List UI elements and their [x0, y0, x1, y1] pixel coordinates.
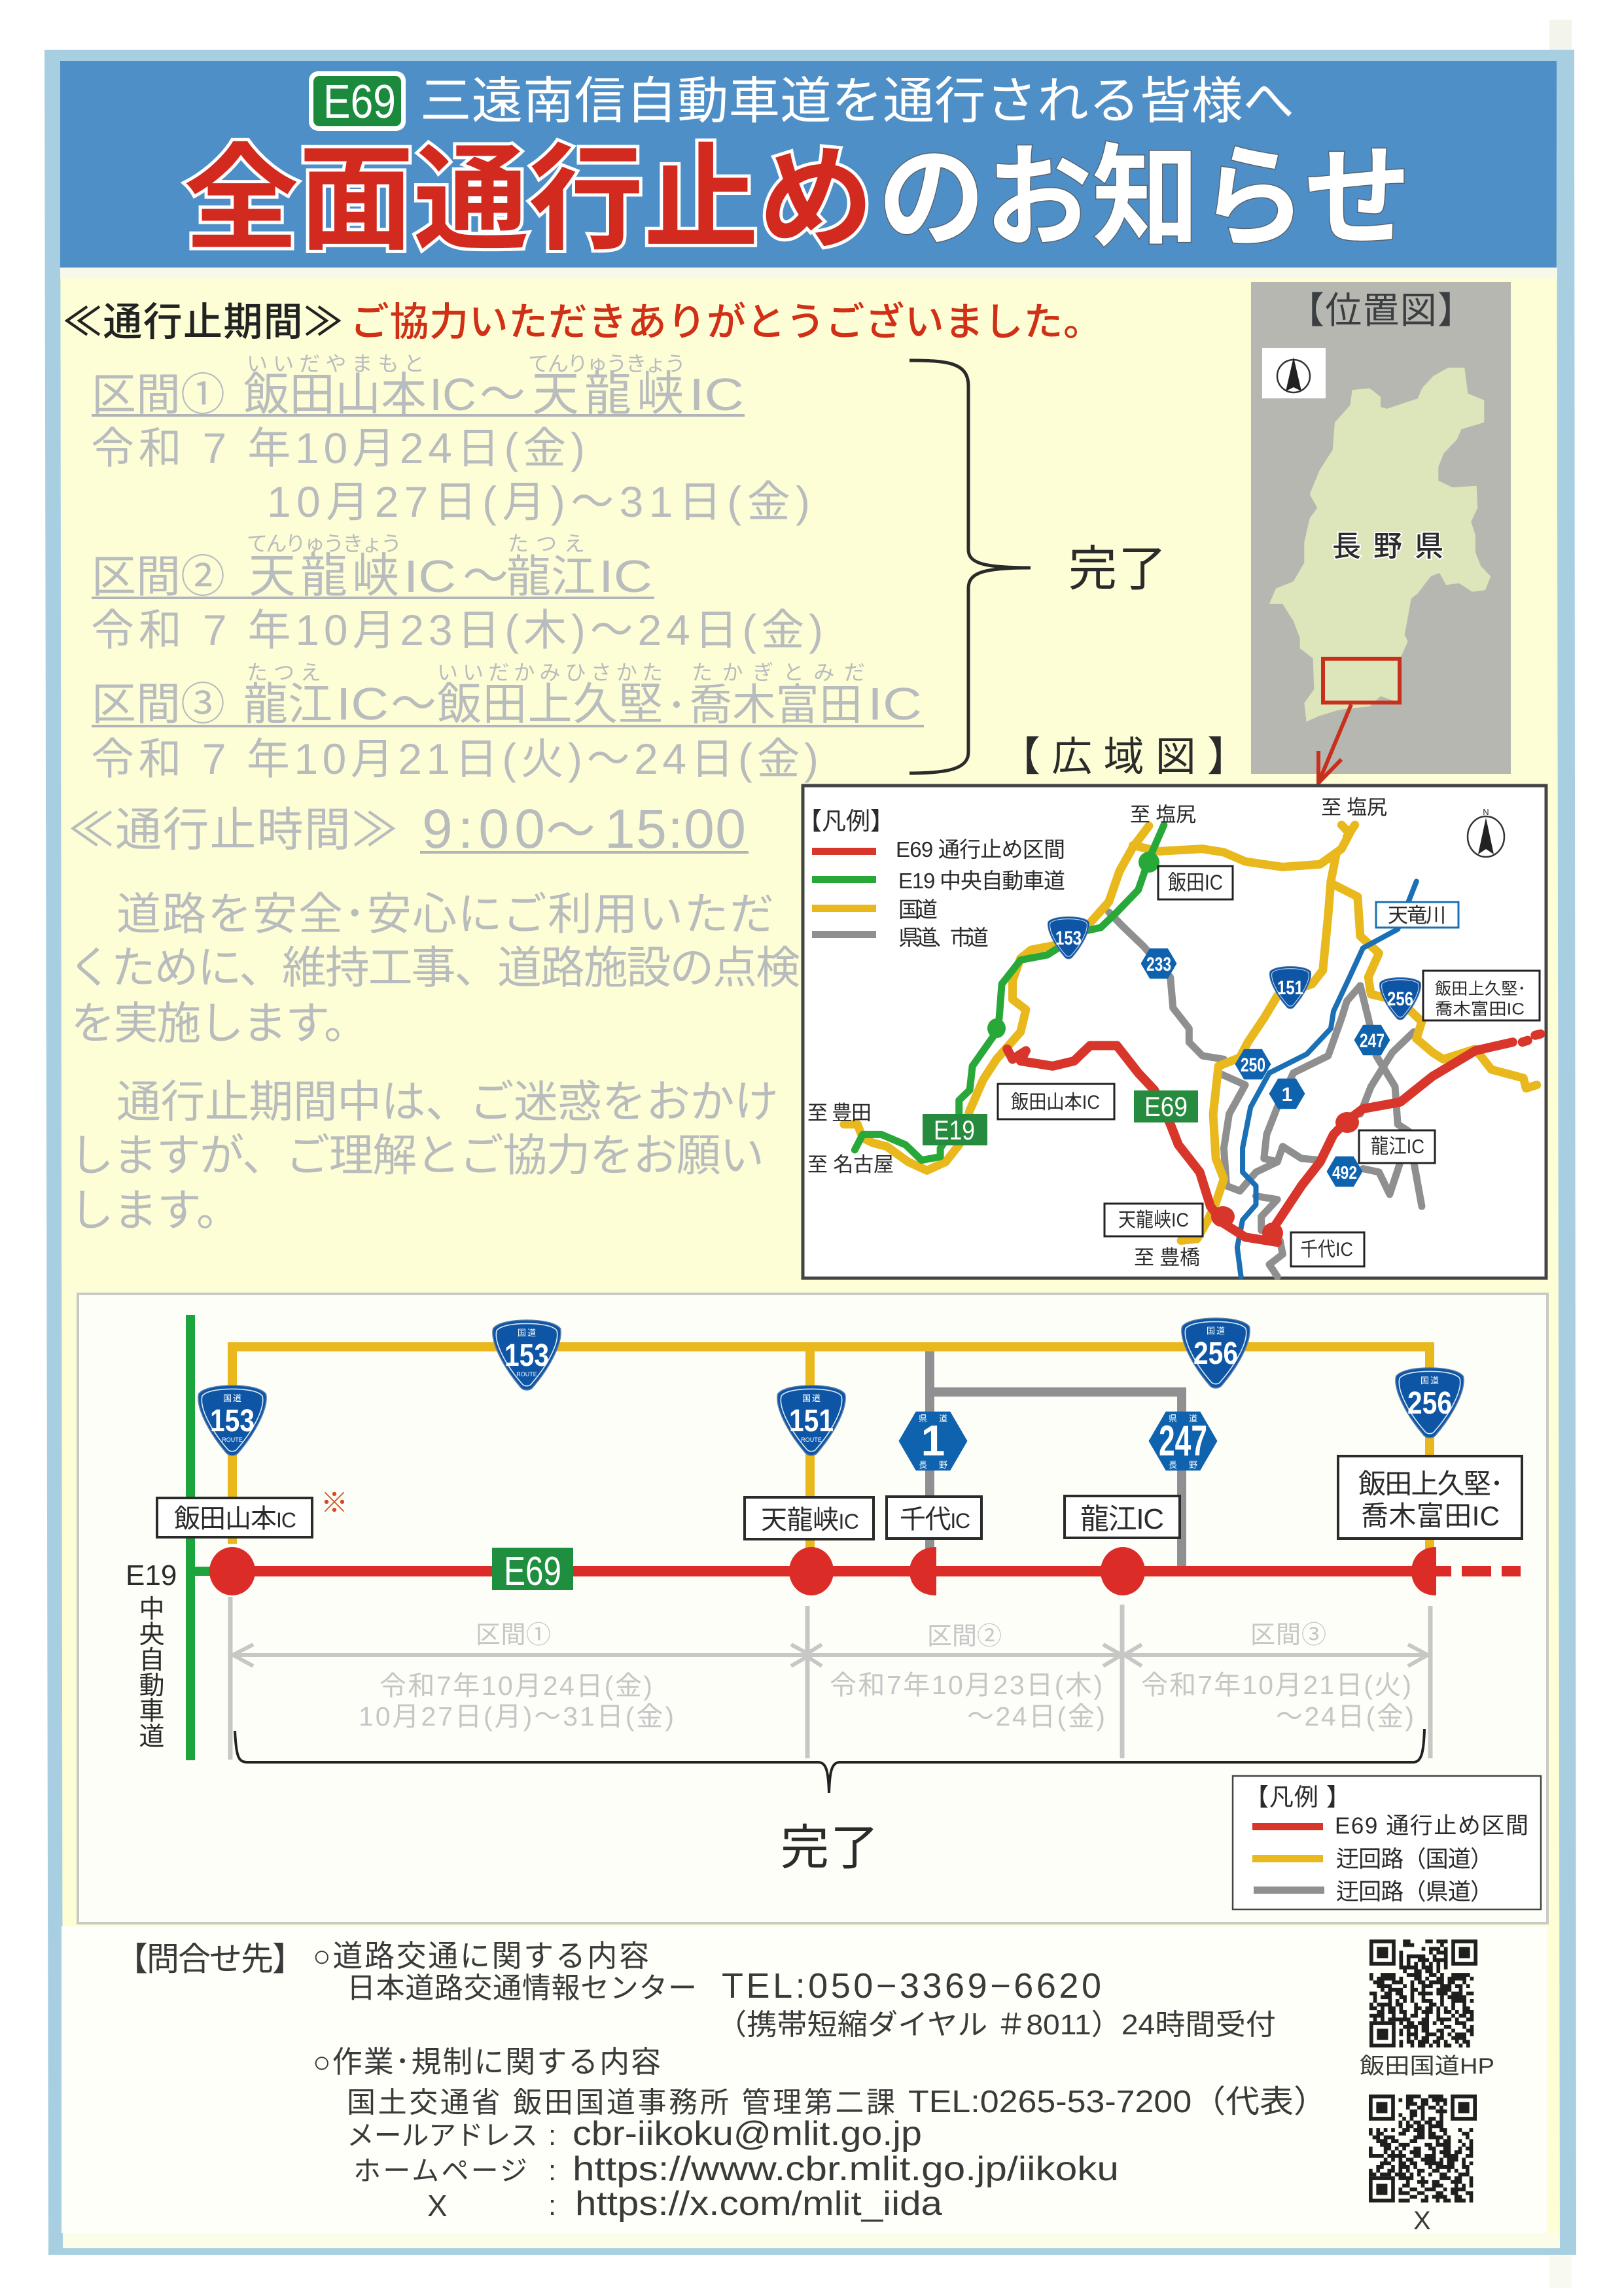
works contact: https://x.com/mlit_iida — [575, 2185, 942, 2223]
section 1 schedule — [91, 352, 810, 526]
E19 label: 央 — [139, 1621, 165, 1649]
section 2 schedule: 令和 7 年10月23日(木)～24日(金) — [91, 606, 823, 654]
section 3 schedule: たかぎとみだ — [692, 661, 865, 684]
detour: prefectural roads — [930, 1351, 1182, 1566]
subtitle: 三遠南信自動車道を通行される皆様へ — [420, 73, 1294, 130]
closure time: 9:00 — [422, 798, 545, 860]
shield 153 left: 国道 — [223, 1393, 241, 1403]
route shields on map: 247 — [1360, 1030, 1385, 1052]
destination labels: 至 豊橋 — [1134, 1246, 1200, 1269]
shield 151: 国道 — [802, 1393, 821, 1403]
IC labels — [157, 1456, 1522, 1539]
section 3 dates: 令和7年10月21日(火) — [1141, 1670, 1411, 1700]
route shields on map: 151 — [1277, 977, 1303, 999]
section 2 schedule: てんりゅうきょう — [247, 532, 402, 555]
paragraph: purpose — [68, 890, 800, 1049]
works contact: : — [548, 2155, 556, 2187]
hexagon 247: 県道 — [1169, 1414, 1197, 1423]
E19 label: 中 — [139, 1595, 165, 1624]
shield 256 right: 国道 — [1421, 1376, 1439, 1385]
E19 line — [186, 1315, 217, 1760]
shield 153 left — [198, 1385, 266, 1455]
destination labels: 至 塩尻 — [1130, 803, 1196, 826]
destination labels — [807, 796, 1387, 1269]
title: red part: 全面通行止め — [184, 136, 874, 264]
works contact: X — [427, 2189, 448, 2223]
thanks message: ご協力いただきありがとうございました。 — [350, 300, 1103, 344]
route shields on map: 250 — [1241, 1054, 1265, 1076]
E19 label: E19 — [126, 1559, 177, 1592]
section 3 dates: 区間③ — [1250, 1622, 1326, 1649]
section 1 schedule: 令和 7 年10月24日(金) — [91, 424, 585, 472]
icon: compass — [1262, 348, 1326, 398]
section 2 schedule: 区間② — [92, 552, 225, 602]
QR caption: Iida office site: 飯田国道HP — [1360, 2054, 1494, 2079]
label: completed: 完了 — [1068, 542, 1167, 596]
section 3 schedule: 区間③ — [92, 680, 225, 729]
IC labels: 天龍峡IC — [761, 1506, 859, 1535]
IC labels on map: E19 — [934, 1115, 975, 1145]
shield 153 top: ROUTE — [516, 1371, 537, 1378]
arrow: to wide-area map — [1318, 704, 1351, 783]
hexagon 247 — [1149, 1412, 1217, 1470]
road traffic contact: ○道路交通に関する内容 — [313, 1939, 649, 1973]
IC labels on map — [923, 866, 1540, 1266]
section 3 schedule — [91, 661, 924, 783]
hexagon 1 — [899, 1412, 967, 1470]
works contact: TEL:0265-53-7200（代表） — [908, 2085, 1328, 2119]
section 2 schedule: たつえ — [508, 532, 585, 555]
shield 153 top: 153 — [504, 1338, 549, 1373]
heading: closure period — [63, 300, 1103, 344]
QR code: X account — [1369, 2095, 1477, 2202]
map legend — [798, 808, 1065, 950]
route shields on map: 1 — [1282, 1084, 1292, 1105]
IC labels: 千代IC — [900, 1505, 970, 1534]
section 3 schedule: たつえ — [247, 661, 321, 684]
works contact: : — [548, 2119, 556, 2151]
route shields on map: 256 — [1387, 988, 1413, 1010]
shield 153 left: 153 — [210, 1404, 255, 1438]
shield 151 — [777, 1385, 845, 1455]
diagram legend: E69 通行止め区間 — [1335, 1813, 1528, 1839]
paragraph: apology: しますが、ご理解とご協力をお願い — [69, 1131, 764, 1181]
Nagano prefecture shape — [1269, 368, 1491, 722]
E69 closure line — [209, 1547, 1521, 1595]
route shields on map: 233 — [1146, 954, 1171, 975]
section 1 schedule: 飯田山本 — [243, 369, 427, 420]
section 2 schedule — [91, 532, 823, 654]
closure time — [68, 798, 749, 860]
section 1 dates — [359, 1622, 674, 1731]
river Tenryu — [1237, 881, 1417, 1276]
section 1 schedule: IC — [689, 369, 744, 420]
IC labels on map: 天龍峡IC — [1118, 1209, 1189, 1231]
section 3 schedule: ･ — [667, 684, 686, 728]
section 3 schedule: いいだかみひさかた — [437, 661, 663, 684]
section 1 dates: 区間① — [476, 1622, 551, 1649]
interchanges on map — [987, 852, 1359, 1244]
road network — [844, 825, 1540, 1276]
hexagon 247: 長野 — [1169, 1460, 1197, 1470]
section 2 schedule: ～ — [463, 551, 508, 602]
location map panel — [1251, 282, 1511, 783]
closure time: 15:00 — [605, 798, 746, 860]
road traffic contact: TEL:050−3369−6620 — [722, 1966, 1101, 2006]
route shields on map: 492 — [1332, 1162, 1357, 1183]
works contact: : — [548, 2189, 556, 2221]
section 1 schedule: ～ — [480, 369, 525, 420]
section 3 dates — [1141, 1622, 1414, 1731]
destination labels: 至 塩尻 — [1321, 796, 1387, 819]
destination labels: 至 名古屋 — [807, 1153, 894, 1176]
road traffic contact: （携帯短縮ダイヤル ＃8011）24時間受付 — [716, 2009, 1276, 2041]
shield 256 right — [1396, 1368, 1464, 1438]
heading: wide-area map: 【広域図】 — [1000, 735, 1248, 780]
route diagram panel — [78, 1294, 1547, 1923]
works contact: メールアドレス — [347, 2120, 538, 2151]
contact section — [115, 1939, 1328, 2223]
label: completed: 完了 — [781, 1820, 879, 1875]
section 2 schedule: IC — [599, 551, 652, 602]
paragraph: purpose: を実施します。 — [71, 999, 368, 1049]
section 2 schedule: IC — [404, 551, 456, 602]
E19 label: 動 — [139, 1672, 165, 1700]
brace: all sections completed — [235, 1729, 1424, 1793]
paragraph: purpose: くために、維持工事、道路施設の点検 — [68, 943, 800, 993]
diagram legend: 迂回路（国道） — [1336, 1847, 1493, 1872]
section 3 schedule: 龍江 — [243, 680, 332, 729]
section 1 dates: 10月27日(月)～31日(金) — [359, 1701, 674, 1731]
highlight box — [1323, 659, 1400, 703]
section 2 dates: 区間② — [927, 1623, 1002, 1650]
label: Nagano: 長野県 — [1332, 531, 1443, 563]
shield 151: ROUTE — [801, 1436, 822, 1443]
hexagon 1: 県道 — [919, 1414, 947, 1423]
closure time: ～ — [546, 803, 595, 859]
E19 label: 自 — [139, 1646, 165, 1675]
paragraph: apology: 通行止期間中は、ご迷惑をおかけ — [116, 1077, 779, 1127]
IC labels: 龍江IC — [1080, 1503, 1164, 1535]
IC labels on map: 飯田山本IC — [1011, 1092, 1100, 1113]
section 2 schedule: 天龍峡 — [249, 550, 399, 602]
shield 153 top — [493, 1320, 561, 1390]
IC labels on map: 龍江IC — [1371, 1135, 1424, 1158]
section 3 schedule: IC — [336, 678, 389, 729]
section 2 dates — [830, 1623, 1105, 1731]
map legend: E19 中央自動車道 — [898, 869, 1065, 893]
route shields on map: 153 — [1055, 928, 1082, 949]
QR caption: X: X — [1413, 2206, 1431, 2235]
badge: E69 on line: E69 — [504, 1549, 561, 1594]
works contact: ホームページ — [353, 2155, 527, 2186]
road traffic contact: 日本道路交通情報センター — [347, 1972, 697, 2004]
paragraph: purpose: 道路を安全･安心にご利用いただ — [116, 890, 774, 939]
section 2 dates: 令和7年10月23日(木) — [830, 1670, 1103, 1700]
section 1 schedule: 10月27日(月)～31日(金) — [267, 478, 810, 526]
works contact: cbr-iikoku@mlit.go.jp — [573, 2115, 922, 2153]
diagram legend: 【凡例 】 — [1244, 1784, 1350, 1811]
section 2 schedule: 龍江 — [506, 552, 595, 602]
IC labels: 飯田上久堅･ — [1358, 1469, 1504, 1499]
section 3 schedule: 喬木富田 — [689, 680, 862, 729]
diagram legend: 迂回路（県道） — [1336, 1879, 1493, 1905]
works contact: 国土交通省 飯田国道事務所 管理第二課 — [347, 2087, 895, 2119]
county and city roads — [1109, 912, 1422, 1276]
header band — [60, 61, 1557, 268]
IC labels on map: 飯田IC — [1168, 871, 1223, 894]
section 3 schedule: 令和 7 年10月21日(火)～24日(金) — [91, 735, 819, 783]
note mark: ※ — [321, 1487, 348, 1518]
IC labels on map: E69 — [1144, 1091, 1188, 1122]
IC labels on map: 天竜川 — [1388, 904, 1446, 927]
heading: closure period: ≪通行止期間≫ — [63, 300, 343, 344]
closure route E69 — [1007, 1034, 1540, 1242]
works contact — [313, 2045, 1328, 2223]
compass on map — [1468, 807, 1504, 857]
works contact: https://www.cbr.mlit.go.jp/iikoku — [573, 2150, 1119, 2188]
IC labels on map: 喬木富田IC — [1435, 1000, 1525, 1018]
map legend: 【凡例】 — [798, 808, 894, 835]
title: white part: のお知らせ — [878, 135, 1411, 261]
shield 256 top: 256 — [1193, 1336, 1238, 1371]
shield 256 top — [1182, 1318, 1250, 1388]
IC labels: 飯田山本IC — [174, 1505, 296, 1533]
E19 label — [126, 1559, 177, 1751]
section dividers and arrows — [230, 1597, 1430, 1760]
IC labels on map: 飯田上久堅･ — [1435, 980, 1526, 998]
shield 256 top: 国道 — [1207, 1326, 1225, 1336]
section 2 dates: ～24日(金) — [967, 1701, 1105, 1731]
section 1 schedule: てんりゅうきょう — [528, 352, 686, 375]
route shields — [198, 1318, 1464, 1470]
works contact: ○作業･規制に関する内容 — [313, 2045, 661, 2079]
QR code: Iida office site — [1369, 1939, 1477, 2047]
map legend: E69 通行止め区間 — [896, 837, 1065, 861]
shield 153 left: ROUTE — [222, 1436, 243, 1443]
IC labels: 喬木富田IC — [1361, 1501, 1500, 1531]
map legend: 国道 — [898, 897, 938, 922]
section 1 schedule: いいだやまもと — [247, 352, 425, 375]
detour: national roads — [232, 1347, 1430, 1550]
section 3 schedule: ～ — [391, 678, 436, 729]
heading: contact: 【問合せ先】 — [115, 1941, 305, 1977]
IC labels on map: 千代IC — [1300, 1239, 1353, 1261]
heading: location map: 【位置図】 — [1288, 290, 1474, 331]
section 1 dates: 令和7年10月24日(金) — [380, 1671, 652, 1701]
route shields on map — [1048, 917, 1421, 1187]
destination labels: 至 豊田 — [807, 1102, 872, 1124]
diagram legend — [1233, 1776, 1541, 1909]
shield 151: 151 — [789, 1404, 834, 1438]
shield 153 top: 国道 — [518, 1328, 536, 1338]
section 3 dates: ～24日(金) — [1276, 1701, 1414, 1731]
shield 256 right: 256 — [1407, 1386, 1452, 1421]
paragraph: apology: します。 — [69, 1186, 241, 1236]
expressway E19 — [855, 825, 1164, 1160]
section 3 schedule: 飯田上久堅 — [437, 680, 663, 729]
E19 label: 道 — [139, 1723, 165, 1751]
section 3 schedule: IC — [868, 678, 922, 729]
section 1 schedule: 天龍峡 — [532, 368, 684, 421]
section 1 schedule: 区間① — [92, 370, 225, 420]
national roads — [844, 825, 1537, 1241]
hexagon 247: 247 — [1159, 1416, 1207, 1465]
brace: completed — [909, 360, 1031, 773]
E19 label: 車 — [139, 1697, 165, 1726]
wide-area map panel — [798, 786, 1546, 1278]
hexagon 1: 1 — [921, 1416, 945, 1465]
closure time: ≪通行止時間≫ — [68, 805, 398, 856]
badge: E69: E69 — [323, 76, 396, 128]
map legend: 県道、市道 — [898, 926, 989, 950]
road traffic contact — [313, 1939, 1276, 2041]
section 1 schedule: IC — [429, 369, 476, 420]
compass on map: N — [1483, 807, 1489, 817]
paragraph: apology — [69, 1077, 779, 1236]
hexagon 1: 長野 — [919, 1460, 947, 1470]
